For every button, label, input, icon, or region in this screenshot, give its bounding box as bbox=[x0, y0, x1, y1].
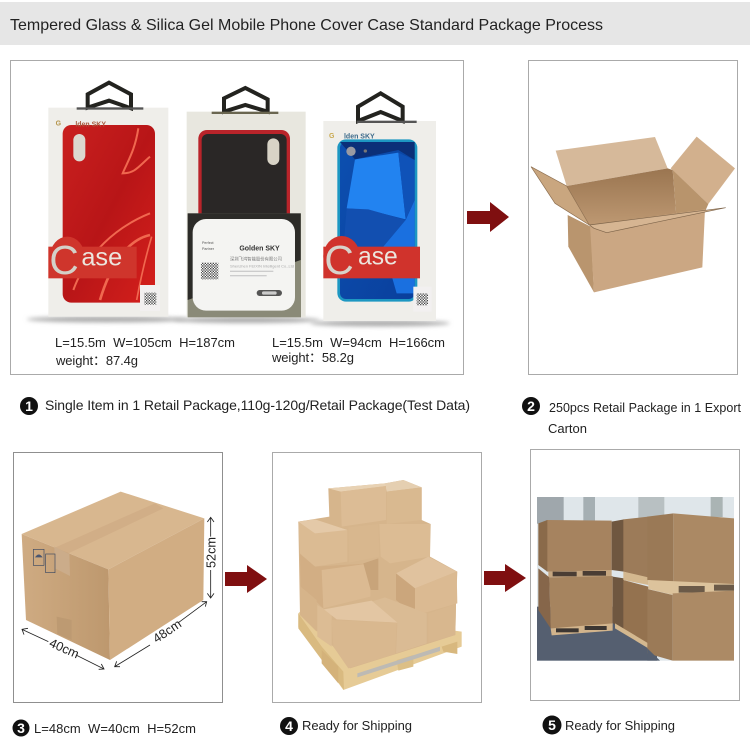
red phone dimensions bbox=[55, 335, 235, 368]
icon: carton stack on pallet bbox=[298, 480, 462, 690]
blue phone retail package: ase bbox=[358, 244, 398, 271]
blue phone retail package: C bbox=[324, 237, 354, 283]
panel: palletized cartons bbox=[272, 452, 482, 702]
icon: open cardboard box bbox=[531, 137, 735, 292]
step 2 caption: Carton bbox=[548, 421, 587, 436]
panel: open carton bbox=[528, 60, 738, 374]
panel: warehouse photo bbox=[530, 450, 740, 700]
dimension: 48cm bbox=[115, 602, 207, 667]
dimension: 40cm: 40cm bbox=[47, 636, 81, 661]
panel: retail packages bbox=[10, 60, 464, 374]
red phone retail package: C bbox=[49, 237, 79, 283]
step 5 caption bbox=[542, 716, 675, 734]
black phone retail package: 深圳飞鸿智能股份有限公司 bbox=[230, 256, 282, 263]
black phone retail package: Shenzhen FEIXIN Intelligent Co.,Ltd bbox=[230, 263, 294, 268]
black phone retail package: Partner bbox=[202, 247, 215, 251]
step 3 caption: 3 bbox=[17, 720, 25, 736]
dimension: 40cm bbox=[22, 628, 104, 669]
dimension: 52cm bbox=[205, 517, 219, 598]
black phone retail package: Golden SKY bbox=[239, 246, 280, 253]
arrow: step 1 to step 2 bbox=[467, 202, 509, 232]
red phone dimensions: L=15.5m W=105cm H=187cm bbox=[55, 335, 235, 350]
arrow: step 4 to step 5 bbox=[484, 564, 526, 592]
blue phone retail package: G bbox=[329, 133, 334, 140]
dimension: 48cm: 48cm bbox=[151, 617, 184, 646]
step 1 caption: 1 bbox=[25, 398, 33, 414]
dimension: 52cm: 52cm bbox=[205, 537, 219, 568]
step 4 caption bbox=[280, 717, 412, 735]
red phone retail package bbox=[27, 83, 187, 322]
step 2 caption: 2 bbox=[527, 398, 535, 414]
red phone retail package: G bbox=[56, 121, 61, 128]
step 5 caption: Ready for Shipping bbox=[565, 718, 675, 733]
step 3 caption: L=48cm W=40cm H=52cm bbox=[34, 721, 196, 736]
black phone retail package: Perfect bbox=[202, 241, 214, 245]
blue phone dimensions bbox=[271, 335, 445, 365]
step 1 caption: Single Item in 1 Retail Package,110g-120g/Retail Package(Test Data) bbox=[45, 397, 470, 413]
arrow: step 3 to step 4 bbox=[225, 565, 267, 593]
red phone retail package: lden SKY bbox=[75, 122, 106, 129]
red phone retail package: ase bbox=[81, 244, 122, 272]
blue phone dimensions: L=15.5m W=94cm H=166cm bbox=[272, 335, 445, 350]
step 4 caption: Ready for Shipping bbox=[302, 718, 412, 733]
panel: sealed carton with dimensions bbox=[14, 452, 222, 702]
step 2 caption: 250pcs Retail Package in 1 Export bbox=[549, 401, 742, 415]
step 5 caption: 5 bbox=[548, 717, 556, 733]
blue phone retail package: lden SKY bbox=[344, 134, 375, 141]
icon: closed cardboard box bbox=[22, 492, 204, 660]
header bar with title bbox=[0, 2, 750, 45]
blue phone dimensions: weight：58.2g bbox=[271, 350, 354, 365]
step 2 caption bbox=[522, 397, 742, 436]
black phone retail package bbox=[173, 88, 320, 323]
red phone dimensions: weight：87.4g bbox=[55, 353, 138, 368]
step 4 caption: 4 bbox=[285, 718, 293, 734]
blue phone retail package bbox=[310, 93, 450, 326]
header bar with title: Tempered Glass & Silica Gel Mobile Phone Cover Case Standard Package Process bbox=[10, 17, 603, 34]
warehouse crates bbox=[537, 497, 734, 661]
